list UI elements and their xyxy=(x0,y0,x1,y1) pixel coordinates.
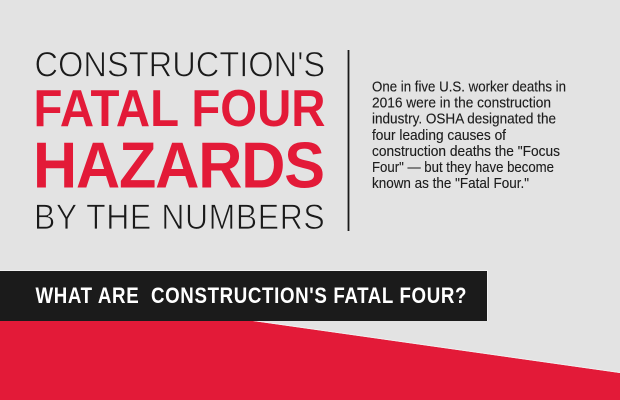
intro paragraph: 2016 were in the construction xyxy=(372,96,551,112)
section banner xyxy=(0,271,487,321)
intro paragraph: Four" — but they have become xyxy=(372,160,554,176)
intro paragraph: industry. OSHA designated the xyxy=(372,112,556,128)
title xyxy=(33,45,326,237)
intro paragraph: construction deaths the "Focus xyxy=(372,144,560,160)
vertical divider xyxy=(348,50,349,231)
title line: By the Numbers: BY THE NUMBERS xyxy=(34,197,325,237)
red diagonal panel xyxy=(0,321,620,400)
intro paragraph: four leading causes of xyxy=(372,128,507,144)
banner background xyxy=(0,271,487,321)
title line: Construction's: CONSTRUCTION'S xyxy=(34,45,325,85)
title line: Fatal Four: FATAL FOUR xyxy=(34,80,326,137)
banner heading: WHAT ARE CONSTRUCTION'S FATAL FOUR? xyxy=(36,284,466,308)
intro paragraph xyxy=(372,80,566,192)
intro paragraph: known as the "Fatal Four." xyxy=(372,176,529,192)
title line: Hazards: HAZARDS xyxy=(33,130,325,202)
intro paragraph: One in five U.S. worker deaths in xyxy=(372,80,566,96)
